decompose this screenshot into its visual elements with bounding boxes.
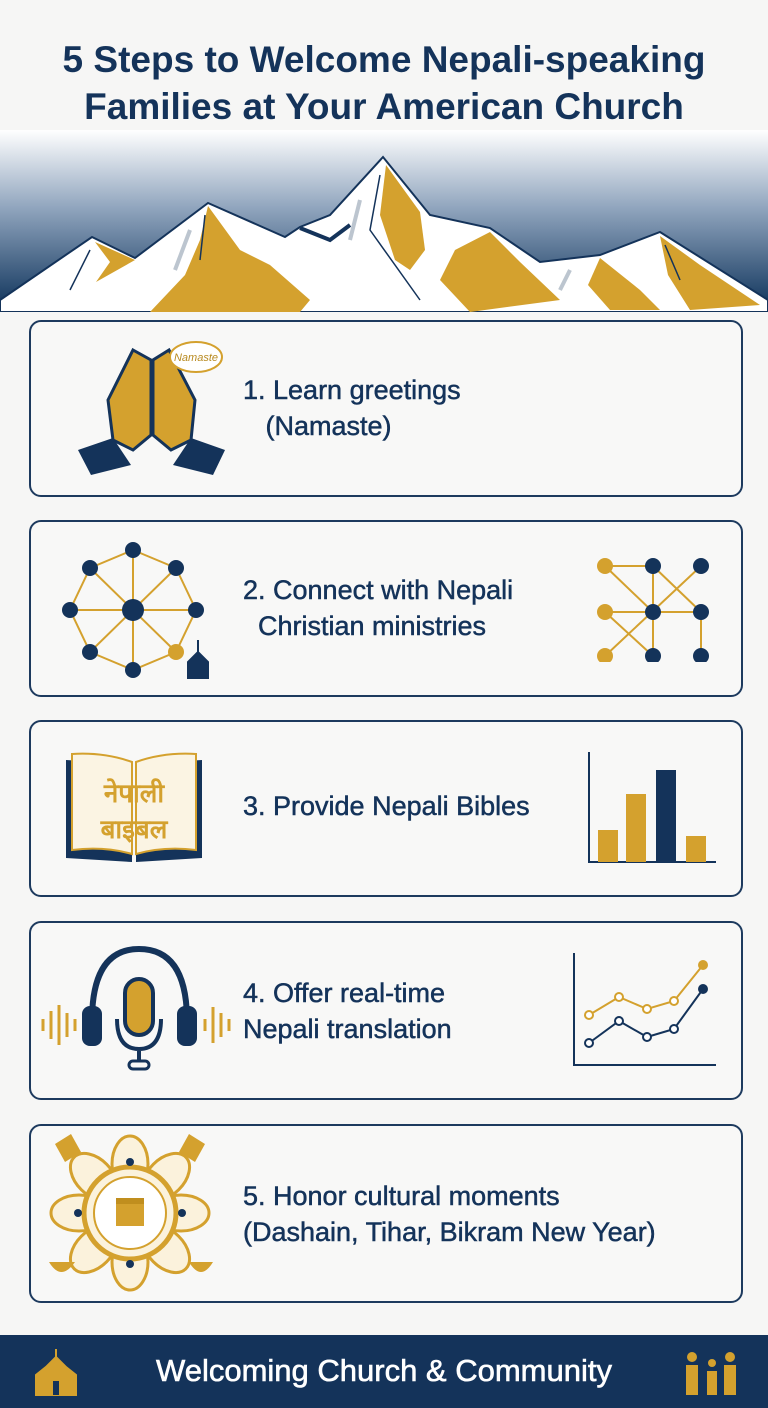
step 3 text: 3. Provide Nepali Bibles: [243, 791, 530, 821]
bar chart: [588, 752, 716, 863]
icon: Nepali bible book: बाइबल: [100, 814, 169, 844]
icon: church: [35, 1349, 77, 1396]
mountain banner: [0, 130, 768, 312]
step 2 text: 2. Connect with Nepali: [243, 575, 513, 605]
step 4 text: Nepali translation: [243, 1014, 452, 1044]
step 5 text: [243, 1181, 656, 1247]
card 5: cultural moments: [29, 1124, 743, 1303]
icon: network grid: [597, 558, 709, 662]
title: [63, 39, 705, 127]
icon: Nepali bible book: नेपाली: [103, 773, 165, 810]
icon: network wheel: [62, 542, 209, 679]
step 4 text: 4. Offer real-time: [243, 978, 445, 1008]
step 1 text: (Namaste): [266, 411, 392, 441]
icon: headphones microphone: [42, 946, 230, 1070]
title: Families at Your American Church: [84, 86, 684, 127]
card 1: greetings: [29, 320, 743, 497]
footer text: Welcoming Church & Community: [156, 1353, 612, 1388]
card 3: bibles: [29, 720, 743, 897]
step 5 text: (Dashain, Tihar, Bikram New Year): [243, 1217, 656, 1247]
step 4 text: [243, 978, 452, 1044]
step 2 text: [243, 575, 513, 641]
icon: praying hands: [78, 341, 225, 475]
icon: family: [686, 1352, 736, 1395]
card 2: ministries: [29, 520, 743, 697]
icon: praying hands: Namaste: [174, 352, 218, 364]
card 4: translation: [29, 921, 743, 1100]
step 1 text: [243, 375, 461, 441]
icon: Nepali bible book: [66, 752, 202, 862]
line chart: [573, 953, 716, 1066]
title: 5 Steps to Welcome Nepali-speaking: [63, 39, 705, 80]
icon: mandala with calendar: [49, 1134, 213, 1292]
step 2 text: Christian ministries: [258, 611, 486, 641]
step 1 text: 1. Learn greetings: [243, 375, 461, 405]
footer banner: [0, 1335, 768, 1408]
step 5 text: 5. Honor cultural moments: [243, 1181, 560, 1211]
